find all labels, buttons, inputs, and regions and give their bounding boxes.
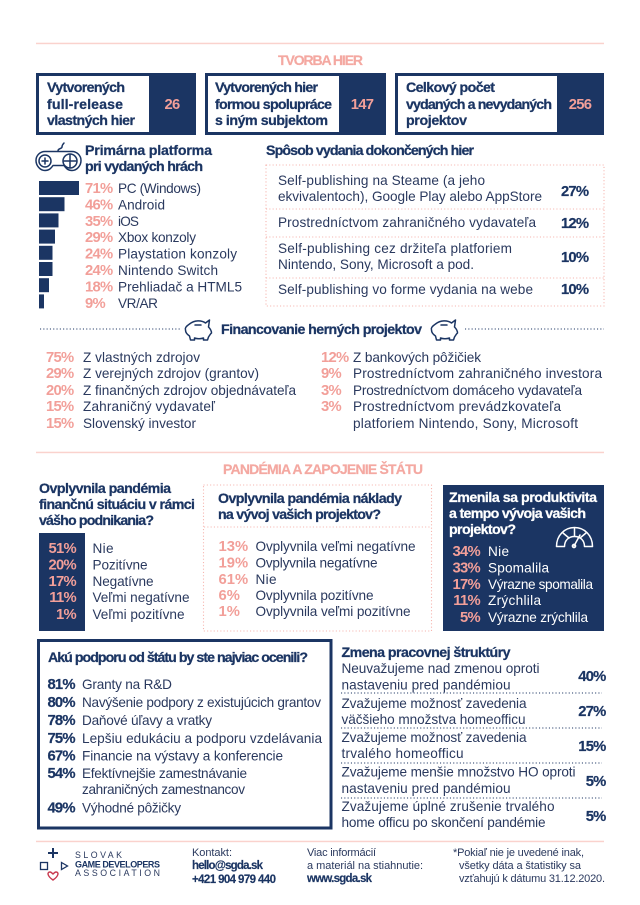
- panel: productivity: Spomalila: [488, 560, 549, 576]
- panel: stat total projects: vydaných a nevydaných: [406, 97, 552, 113]
- panel: productivity: 5%: [460, 610, 481, 626]
- panel: pandemic finance: Veľmi pozitívne: [92, 607, 184, 622]
- panel: pandemic costs: na vývoj vašich projektov?: [218, 507, 381, 523]
- panel: state support: Efektívnejšie zamestnávanie: [82, 766, 247, 781]
- panel: state support: Akú podporu od štátu by ste najviac ocenili?: [48, 650, 308, 666]
- icon: game controller: [36, 143, 81, 170]
- list: financing right: 12%: [321, 350, 349, 366]
- panel: publishing method table: 10%: [561, 250, 589, 266]
- panel: stat co-op games: Vytvorených hier: [215, 80, 318, 96]
- bar chart: primary platform: Playstation konzoly: [118, 247, 237, 262]
- panel: state support: [38, 640, 331, 828]
- panel: work structure: nastaveniu pred pandémiou: [342, 781, 510, 796]
- list: financing right: 3%: [321, 383, 342, 399]
- bar chart: primary platform: Nintendo Switch: [118, 263, 218, 278]
- panel: stat full-release games: 26: [164, 97, 180, 113]
- bar chart: primary platform: Android: [118, 197, 165, 212]
- contact: [192, 847, 276, 886]
- more info: www.sgda.sk: [306, 873, 373, 885]
- panel: pandemic finance: Negatívne: [92, 574, 154, 589]
- list: financing right: Z bankových pôžičiek: [353, 350, 481, 365]
- panel: work structure: home officu po skončení pandémie: [342, 815, 546, 830]
- bar chart: primary platform: VR/AR: [118, 296, 158, 311]
- heading: publishing method: Spôsob vydania dokončených hier: [266, 143, 474, 159]
- list: financing right: [321, 350, 602, 431]
- list: financing left: 29%: [46, 366, 74, 382]
- list: financing right: Prostredníctvom domáceho vydavateľa: [353, 383, 582, 398]
- bar chart: primary platform: 24%: [85, 263, 113, 279]
- panel: pandemic costs: Ovplyvnila pandémia náklady: [218, 491, 402, 507]
- panel: pandemic finance: [39, 481, 195, 631]
- panel: pandemic finance: 51%: [48, 541, 77, 557]
- more info: [306, 847, 423, 885]
- icon: gauge: [556, 528, 592, 548]
- bar chart: primary platform: Prehliadač a HTML5: [118, 279, 242, 294]
- panel: pandemic costs: Nie: [256, 572, 276, 587]
- panel: pandemic finance: Ovplyvnila pandémia: [39, 481, 171, 497]
- list: financing right: 3%: [321, 399, 342, 415]
- panel: stat total projects: Celkový počet: [406, 80, 495, 96]
- bar chart: primary platform: 46%: [85, 197, 113, 213]
- panel: productivity: Zmenila sa produktivita: [449, 490, 597, 506]
- list: financing left: [46, 350, 296, 432]
- heading: pandemic: PANDÉMIA A ZAPOJENIE ŠTÁTU: [223, 460, 423, 477]
- bar chart: primary platform: 29%: [85, 230, 113, 246]
- panel: work structure: nastaveniu pred pandémiou: [342, 678, 510, 692]
- panel: work structure: Zvažujeme možnosť zavedenia: [342, 696, 527, 711]
- panel: productivity: Výrazne spomalila: [488, 577, 593, 592]
- panel: publishing method table: Self-publishing na Steame (a jeho: [278, 173, 485, 188]
- panel: stat total projects: [396, 73, 604, 135]
- panel: state support: 80%: [48, 695, 75, 711]
- panel: pandemic finance: 20%: [48, 558, 77, 574]
- panel: work structure: Zvažujeme menšie množstvo HO oproti: [342, 764, 576, 780]
- bar chart: primary platform: 9%: [85, 296, 106, 312]
- panel: publishing method table: Prostredníctvom zahraničného vydavateľa: [278, 215, 536, 230]
- panel: state support: 81%: [48, 677, 75, 693]
- panel: pandemic finance: 17%: [48, 574, 77, 590]
- panel: stat full-release games: full-release: [47, 97, 123, 113]
- panel: work structure: Neuvažujeme nad zmenou oproti: [342, 661, 540, 676]
- heading: primary platform: Primárna platforma: [85, 143, 212, 159]
- list: financing left: 20%: [46, 383, 74, 399]
- panel: stat co-op games: [206, 73, 386, 135]
- panel: pandemic costs: 19%: [218, 556, 248, 572]
- list: financing left: Slovenský investor: [83, 416, 196, 431]
- panel: productivity: 34%: [452, 544, 481, 560]
- bar chart: primary platform: PC (Windows): [118, 181, 201, 196]
- panel: pandemic costs: Ovplyvnila pozitívne: [256, 588, 374, 603]
- panel: productivity: 17%: [452, 577, 481, 593]
- panel: stat full-release games: [38, 73, 196, 135]
- icon: piggy bank left: [185, 320, 212, 340]
- panel: stat total projects: projektov: [406, 113, 467, 129]
- panel: publishing method table: 10%: [561, 282, 589, 298]
- panel: state support: 49%: [48, 800, 75, 816]
- panel: pandemic finance: vášho podnikania?: [39, 513, 154, 529]
- panel: pandemic finance: finančnú situáciu v rámci: [39, 497, 195, 513]
- panel: pandemic costs: 6%: [218, 588, 240, 604]
- panel: stat total projects: 256: [569, 97, 592, 113]
- panel: state support: Výhodné pôžičky: [82, 800, 181, 816]
- panel: state support: Navýšenie podpory z existujúcich grantov: [82, 695, 321, 710]
- panel: stat co-op games: formou spolupráce: [215, 97, 332, 113]
- more info: a materiál na stiahnutie:: [307, 860, 423, 872]
- panel: productivity: Zrýchlila: [488, 593, 541, 608]
- list: financing right: platforiem Nintendo, Sony, Microsoft: [353, 416, 578, 431]
- panel: pandemic finance: Nie: [92, 541, 114, 556]
- panel: productivity: 33%: [452, 560, 481, 576]
- panel: state support: 78%: [48, 713, 75, 729]
- heading: Tvorba hier: TVORBA HIER: [278, 52, 363, 68]
- panel: stat co-op games: s iným subjektom: [215, 113, 328, 129]
- list: financing left: Zahraničný vydavateľ: [83, 399, 216, 414]
- logo: SGDA: GAME DEVELOPERS: [75, 860, 160, 870]
- list: financing right: Prostredníctvom prevádzkovateľa: [353, 399, 561, 414]
- bar chart: primary platform: [39, 181, 242, 312]
- panel: productivity: [443, 485, 604, 631]
- list: financing left: Z verejných zdrojov (grantov): [83, 366, 259, 381]
- panel: state support: 75%: [48, 731, 75, 747]
- panel: pandemic costs: 13%: [218, 539, 248, 555]
- panel: pandemic costs: 61%: [218, 572, 248, 588]
- panel: productivity: Nie: [488, 544, 509, 559]
- icon: piggy bank right: [431, 320, 458, 340]
- panel: state support: Financie na výstavy a konferencie: [82, 748, 283, 764]
- list: financing left: Z finančných zdrojov objednávateľa: [83, 383, 296, 398]
- footnote: *Pokiaľ nie je uvedené inak,: [453, 847, 584, 859]
- logo: SGDA: [40, 848, 160, 880]
- panel: state support: 54%: [48, 766, 75, 782]
- panel: publishing method table: Self-publishing cez držiteľa platforiem: [278, 241, 512, 256]
- list: financing left: 15%: [46, 399, 74, 415]
- panel: productivity: projektov?: [449, 522, 516, 538]
- panel: publishing method table: Nintendo, Sony, Microsoft a pod.: [278, 257, 474, 272]
- contact: +421 904 979 440: [192, 874, 276, 886]
- bar chart: primary platform: Xbox konzoly: [118, 230, 196, 245]
- panel: work structure: 5%: [586, 774, 606, 790]
- footnote: vzťahujú k dátumu 31.12.2020.: [459, 873, 605, 885]
- contact: hello@sgda.sk: [192, 860, 264, 872]
- list: financing left: Z vlastných zdrojov: [83, 350, 200, 365]
- panel: work structure: 27%: [578, 704, 606, 720]
- bar chart: primary platform: 18%: [85, 279, 113, 295]
- panel: pandemic costs: [204, 485, 432, 631]
- panel: work structure: Zmena pracovnej štruktúry: [342, 645, 511, 661]
- panel: work structure: Zvažujeme úplné zrušenie trvalého: [342, 799, 554, 814]
- panel: publishing method table: ekvivalentoch), Google Play alebo AppStore: [278, 189, 542, 204]
- footnote: všetky dáta a štatistiky sa: [459, 860, 582, 872]
- panel: publishing method table: 27%: [561, 184, 589, 200]
- logo: SGDA: ASSOCIATION: [75, 868, 160, 878]
- panel: pandemic finance: Pozitívne: [92, 558, 148, 572]
- panel: pandemic costs: 1%: [218, 604, 240, 620]
- bar chart: primary platform: iOS: [118, 214, 139, 229]
- panel: publishing method table: Self-publishing vo forme vydania na webe: [278, 282, 533, 297]
- contact: Kontakt:: [192, 847, 232, 859]
- panel: publishing method table: [266, 165, 604, 306]
- list: financing right: Prostredníctvom zahraničného investora: [353, 366, 602, 381]
- bar chart: primary platform: 71%: [85, 181, 113, 197]
- panel: pandemic costs: Ovplyvnila veľmi negatívne: [256, 539, 416, 554]
- panel: state support: Daňové úľavy a vratky: [82, 713, 212, 728]
- panel: pandemic finance: 1%: [56, 607, 77, 623]
- heading: primary platform: pri vydaných hrách: [85, 159, 203, 175]
- panel: pandemic costs: Ovplyvnila veľmi pozitívne: [256, 604, 410, 619]
- list: financing left: 75%: [46, 350, 74, 366]
- more info: Viac informácií: [307, 847, 376, 859]
- bar chart: primary platform: 35%: [85, 214, 113, 230]
- panel: stat full-release games: vlastných hier: [47, 113, 135, 129]
- panel: work structure: 15%: [578, 739, 606, 755]
- panel: work structure: 5%: [586, 809, 606, 825]
- panel: state support: zahraničných zamestnancov: [82, 782, 245, 797]
- panel: work structure: Zvažujeme možnosť zavedenia: [342, 730, 527, 745]
- heading: financing: Financovanie herných projektov: [221, 322, 422, 338]
- bar chart: primary platform: 24%: [85, 247, 113, 263]
- panel: state support: Lepšiu edukáciu a podporu vzdelávania: [82, 731, 322, 746]
- panel: pandemic costs: Ovplyvnila negatívne: [256, 556, 378, 570]
- footnote: [453, 847, 605, 885]
- panel: work structure: väčšieho množstva homeofficu: [342, 712, 526, 727]
- panel: state support: 67%: [48, 748, 75, 764]
- panel: work structure: [341, 645, 606, 830]
- panel: pandemic finance: Veľmi negatívne: [92, 590, 190, 605]
- panel: work structure: trvalého homeofficu: [342, 746, 464, 761]
- panel: productivity: Výrazne zrýchlila: [488, 610, 588, 625]
- panel: productivity: a tempo vývoja vašich: [449, 506, 586, 522]
- panel: state support: Granty na R&D: [82, 677, 172, 692]
- list: financing left: 15%: [46, 416, 74, 432]
- panel: publishing method table: 12%: [561, 216, 589, 232]
- panel: pandemic finance: 11%: [49, 590, 77, 606]
- heading: primary platform: [85, 143, 212, 175]
- panel: work structure: 40%: [578, 669, 606, 685]
- list: financing right: 9%: [321, 366, 342, 382]
- panel: stat co-op games: 147: [351, 97, 374, 113]
- panel: productivity: 11%: [453, 593, 481, 609]
- panel: stat full-release games: Vytvorených: [47, 80, 125, 96]
- logo: SGDA: SLOVAK: [75, 850, 122, 860]
